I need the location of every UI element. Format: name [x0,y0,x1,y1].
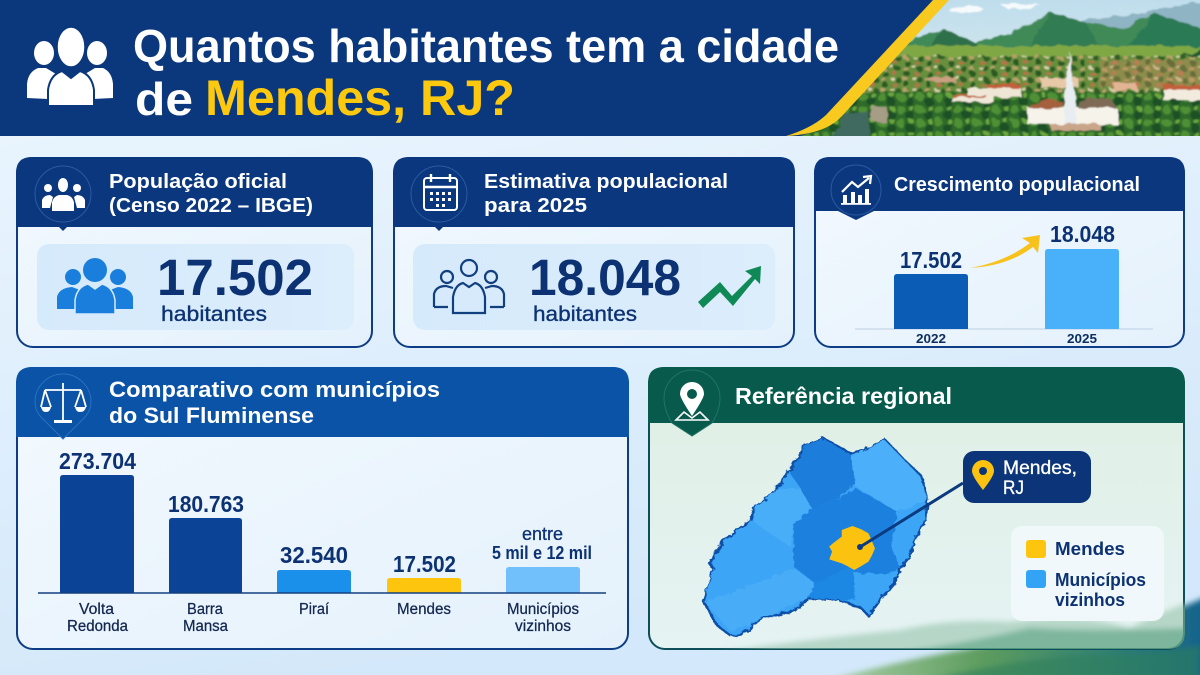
bar chart: 17.502 [900,247,962,273]
values: 5 mil e 12 mil [492,543,592,563]
category labels: Barra [187,601,223,618]
title: de [135,73,193,125]
heading: do Sul Fluminense [109,403,314,428]
values: 273.704 [59,448,136,474]
value: 17.502 [157,249,313,306]
yellow diagonal band [786,0,949,136]
values: 180.763 [168,491,244,517]
bar chart: 2022 [916,331,946,346]
category labels: Mendes [397,601,451,618]
legend: vizinhos [1055,590,1125,610]
values: 17.502 [393,551,456,577]
bar 2022 [894,274,968,329]
callout: Mendes, [1003,458,1077,479]
category labels: Mansa [183,618,228,635]
heading: Estimativa populacional [484,170,728,193]
heading: População oficial [109,170,287,193]
title [133,20,839,126]
values: entre [522,524,563,544]
heading: para 2025 [484,194,587,217]
arrow [970,235,1040,268]
panel: crescimento populacional [814,157,1185,347]
category labels: vizinhos [515,618,571,635]
bar chart [38,448,606,635]
icon: calendar badge [411,166,467,231]
callout [963,451,1091,503]
heading [109,377,440,428]
callout: RJ [1003,478,1024,499]
bar chart [855,221,1153,346]
heading: Referência regional [735,383,952,409]
heading [484,170,728,217]
title: Quantos habitantes tem a cidade [133,20,839,72]
category labels: Municípios [507,601,579,618]
map [704,438,927,636]
icon: scales badge [35,374,91,439]
unit: habitantes [161,303,267,326]
icon: yellow pin [972,460,994,490]
category labels: Piraí [299,601,330,618]
bar chart: 2025 [1067,331,1097,346]
value: 18.048 [529,249,681,306]
connector line [857,483,963,550]
panel: referência regional [648,367,1195,655]
legend: Mendes [1055,539,1125,559]
category labels: Volta [79,601,114,618]
heading: (Censo 2022 – IBGE) [109,194,313,217]
heading [109,170,313,217]
icon: group of people [27,27,113,106]
panel: comparativo [16,367,629,649]
bar chart: 18.048 [1050,221,1115,247]
legend: Municípios [1055,570,1146,590]
bars [60,475,580,593]
title: Mendes, RJ? [205,70,515,126]
photo: aerial view of Mendes [800,0,1200,136]
icon: green trend arrow [698,266,761,308]
value box [413,244,775,330]
category labels [67,601,579,635]
unit: habitantes [533,303,637,326]
heading: Crescimento populacional [894,173,1140,196]
panel: população oficial [16,157,373,347]
bottom right mountains [830,595,1200,675]
icon: people badge [35,166,91,231]
icon: growth chart badge [831,165,881,220]
values [59,448,592,577]
value box [37,244,354,330]
panel: estimativa 2025 [393,157,795,347]
values: 32.540 [280,542,348,568]
category labels: Redonda [67,618,128,635]
icon: location pin badge [664,370,720,436]
legend [1011,526,1164,621]
icon: people blue [57,258,133,314]
header banner [0,0,1200,146]
icon: people outline [434,260,504,313]
bar 2025 [1045,249,1119,329]
heading: Comparativo com municípios [109,377,440,402]
